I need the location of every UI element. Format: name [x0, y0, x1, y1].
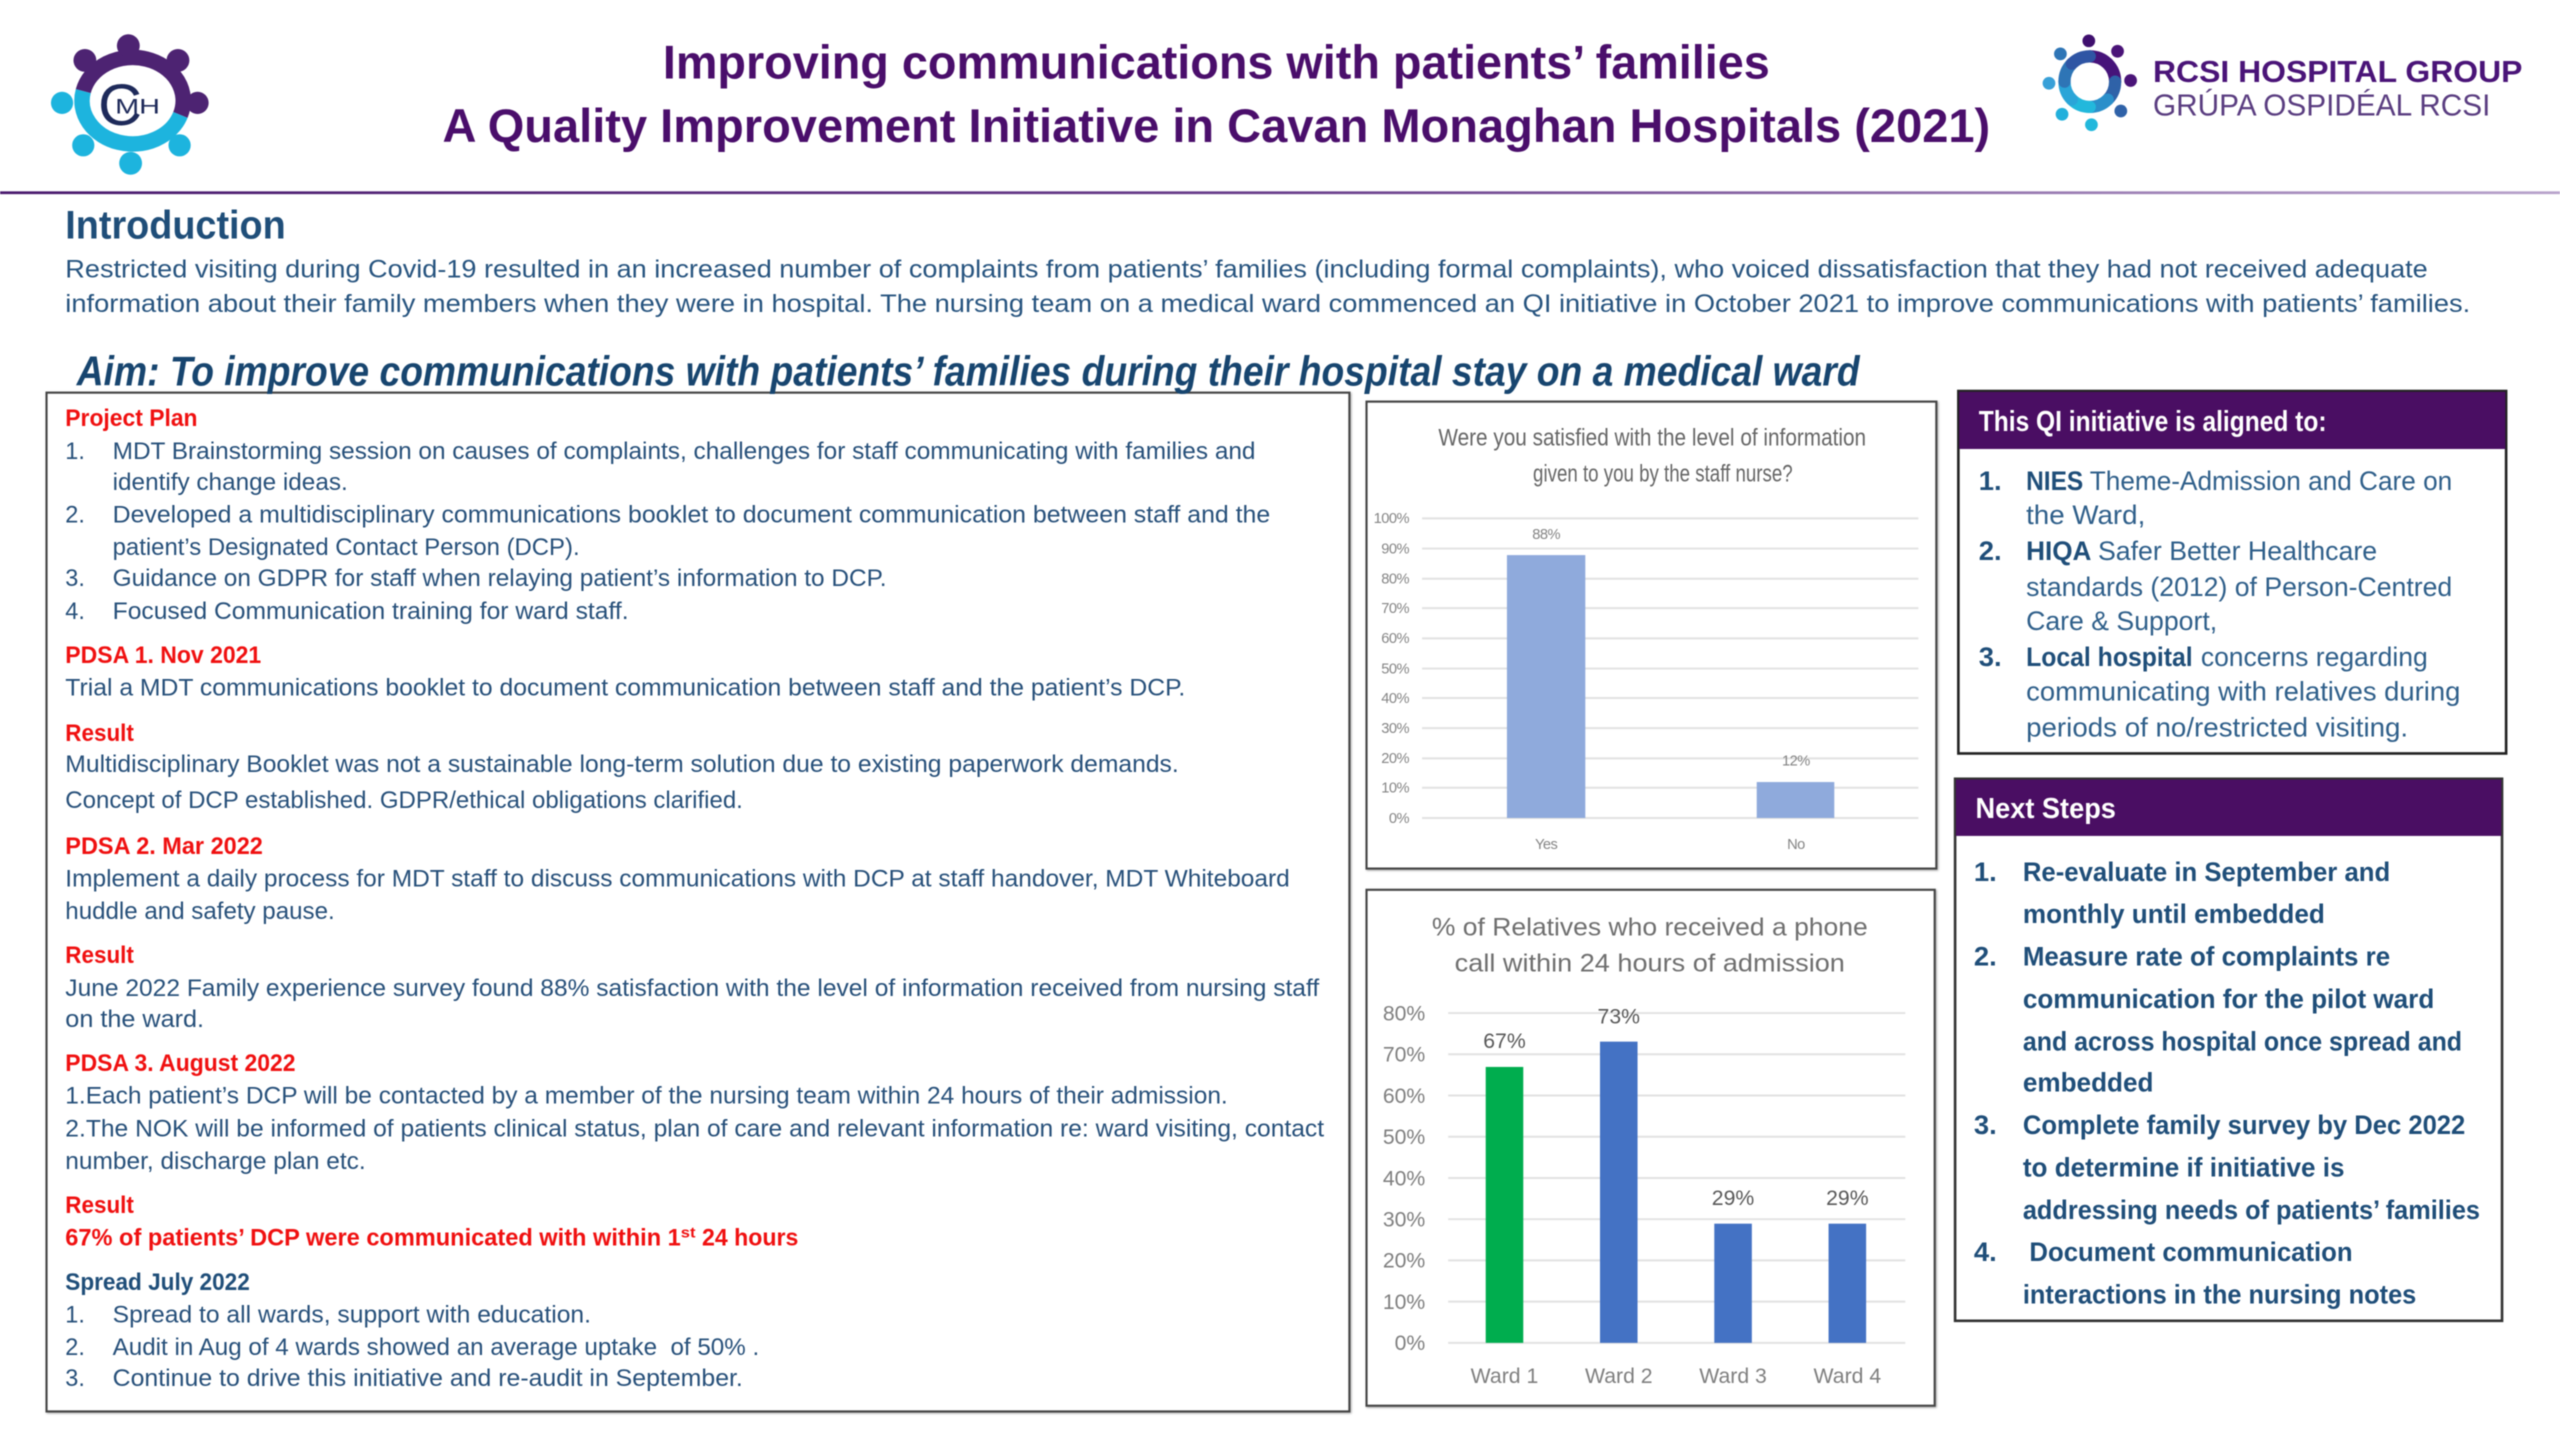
- chart: phone call within 24 hours: 0%: [1395, 1332, 1425, 1355]
- chart: phone call within 24 hours: 29%: [1712, 1187, 1754, 1210]
- chart: phone call within 24 hours: 40%: [1383, 1167, 1425, 1190]
- project plan: 3.: [65, 566, 85, 592]
- panel: next steps: 1.: [1974, 857, 1997, 887]
- panel: next steps: [1955, 779, 2502, 1321]
- panel: next steps: Measure rate of complaints re: [2023, 942, 2390, 972]
- panel: project plan and PDSA cycles: [47, 393, 1349, 1411]
- panel: QI initiative alignment: Safer Better Healthcare: [2098, 536, 2377, 566]
- introduction: Restricted visiting during Covid-19 resulted in an increased number of complaints from patients’ families (including formal complaints), who voiced dissatisfaction that they had not received adequate: [65, 256, 2428, 284]
- chart: phone call within 24 hours: 80%: [1383, 1002, 1425, 1025]
- chart: satisfaction with information: Were you satisfied with the level of information: [1438, 426, 1866, 452]
- logo: RCSI Hospital Group: RCSI HOSPITAL GROUP: [2153, 56, 2522, 89]
- chart: phone call within 24 hours: 20%: [1383, 1250, 1425, 1273]
- panel: next steps: addressing needs of patients’ families: [2023, 1195, 2480, 1225]
- chart: phone call within 24 hours: 60%: [1383, 1085, 1425, 1108]
- panel: QI initiative alignment: Care & Support,: [2026, 606, 2217, 636]
- panel: QI initiative alignment: 2.: [1979, 536, 2002, 566]
- panel: next steps: embedded: [2023, 1067, 2153, 1097]
- project plan: Developed a multidisciplinary communications booklet to document communication between staff and the: [113, 502, 1270, 528]
- spread: Audit in Aug of 4 wards showed an average uptake of 50% .: [113, 1335, 759, 1361]
- PDSA 3: 24 hours: [702, 1226, 798, 1252]
- logo: RCSI Hospital Group: GRÚPA OSPIDÉAL RCSI: [2153, 90, 2490, 123]
- logo: CMH: [51, 34, 209, 175]
- panel: next steps: monthly until embedded: [2023, 899, 2325, 929]
- title: A Quality Improvement Initiative in Cavan Monaghan Hospitals (2021): [442, 100, 1990, 153]
- spread: Spread July 2022: [65, 1270, 250, 1296]
- panel: next steps: to determine if initiative is: [2023, 1152, 2344, 1182]
- panel: next steps: Next Steps: [1976, 793, 2116, 825]
- panel: QI initiative alignment: periods of no/restricted visiting.: [2026, 712, 2408, 742]
- aim: Aim: To improve communications with patients’ families during their hospital stay on a medical ward: [76, 347, 1861, 394]
- chart: satisfaction with information: 70%: [1381, 601, 1409, 617]
- panel: QI initiative alignment: standards (2012) of Person-Centred: [2026, 572, 2452, 602]
- PDSA 1: [65, 643, 1185, 814]
- spread: Continue to drive this initiative and re-audit in September.: [113, 1366, 743, 1392]
- project plan: Focused Communication training for ward staff.: [113, 599, 629, 625]
- chart: satisfaction with information: 88%: [1532, 527, 1560, 543]
- panel: next steps: interactions in the nursing notes: [2023, 1280, 2416, 1310]
- logo: CMH: MH: [115, 95, 160, 118]
- chart: phone call within 24 hours: [1367, 890, 1935, 1406]
- introduction: information about their family members when they were in hospital. The nursing team on a medical ward commenced an QI initiative in October 2021 to improve communications with patients’ families.: [65, 290, 2470, 318]
- PDSA 3: number, discharge plan etc.: [65, 1149, 366, 1175]
- PDSA 3: st: [681, 1226, 696, 1242]
- introduction: [65, 203, 2470, 318]
- PDSA 3: 67% of patients’ DCP were communicated with within 1: [65, 1226, 681, 1252]
- chart: satisfaction with information: 40%: [1381, 691, 1409, 707]
- chart: phone call within 24 hours: 50%: [1383, 1126, 1425, 1149]
- panel: QI initiative alignment: Local hospital: [2026, 642, 2193, 672]
- PDSA 3: 2.The NOK will be informed of patients clinical status, plan of care and relevant information re: ward visiting, contact: [65, 1116, 1325, 1142]
- title: Improving communications with patients’ families: [663, 36, 1770, 89]
- chart: satisfaction with information: No: [1787, 837, 1805, 853]
- project plan: Project Plan: [65, 406, 198, 432]
- logo: RCSI Hospital Group: [2043, 34, 2522, 131]
- logo: CMH: C: [98, 73, 142, 138]
- chart: satisfaction with information: 90%: [1381, 541, 1409, 557]
- PDSA 2: Implement a daily process for MDT staff to discuss communications with DCP at staff handover, MDT Whiteboard: [65, 867, 1290, 893]
- chart: satisfaction with information: [1367, 402, 1936, 869]
- spread: 3.: [65, 1366, 85, 1392]
- project plan: [65, 406, 1270, 625]
- panel: QI initiative alignment: 1.: [1979, 466, 2002, 496]
- chart: satisfaction with information: 60%: [1381, 631, 1409, 647]
- panel: QI initiative alignment: NIES: [2026, 466, 2083, 496]
- panel: QI initiative alignment: the Ward,: [2026, 500, 2145, 530]
- project plan: identify change ideas.: [113, 470, 348, 496]
- panel: QI initiative alignment: Theme-Admission and Care on: [2090, 466, 2452, 496]
- introduction: Introduction: [65, 203, 286, 247]
- PDSA 2: Result: [65, 943, 134, 969]
- panel: QI initiative alignment: concerns regarding: [2201, 642, 2428, 672]
- project plan: 2.: [65, 502, 85, 528]
- chart: phone call within 24 hours: 67%: [1483, 1030, 1526, 1053]
- chart: phone call within 24 hours: Ward 4: [1814, 1365, 1881, 1388]
- PDSA 2: on the ward.: [65, 1007, 204, 1033]
- project plan: Guidance on GDPR for staff when relaying patient’s information to DCP.: [113, 566, 887, 592]
- chart: phone call within 24 hours: 10%: [1383, 1291, 1425, 1314]
- panel: QI initiative alignment: This QI initiative is aligned to:: [1979, 406, 2327, 438]
- PDSA 3: PDSA 3. August 2022: [65, 1051, 296, 1077]
- chart: satisfaction with information: 20%: [1381, 751, 1409, 767]
- title: [442, 36, 1990, 153]
- spread: [65, 1270, 759, 1392]
- PDSA 2: PDSA 2. Mar 2022: [65, 834, 263, 860]
- panel: QI initiative alignment: communicating with relatives during: [2026, 676, 2460, 706]
- PDSA 2: June 2022 Family experience survey found 88% satisfaction with the level of information received from nursing staff: [65, 976, 1320, 1002]
- PDSA 3: 1.Each patient’s DCP will be contacted by a member of the nursing team within 24 hours of their admission.: [65, 1084, 1228, 1110]
- chart: phone call within 24 hours: Ward 1: [1471, 1365, 1538, 1388]
- chart: phone call within 24 hours: 29%: [1826, 1187, 1869, 1210]
- chart: phone call within 24 hours: Ward 3: [1699, 1365, 1767, 1388]
- chart: phone call within 24 hours: 73%: [1598, 1006, 1640, 1029]
- chart: satisfaction with information: 30%: [1381, 721, 1409, 737]
- chart: phone call within 24 hours: call within 24 hours of admission: [1455, 949, 1845, 977]
- panel: next steps: communication for the pilot ward: [2023, 984, 2434, 1014]
- panel: next steps: Complete family survey by Dec 2022: [2023, 1110, 2465, 1140]
- project plan: MDT Brainstorming session on causes of complaints, challenges for staff communicating with families and: [113, 439, 1256, 465]
- panel: next steps: 4.: [1974, 1237, 1997, 1267]
- panel: next steps: Re-evaluate in September and: [2023, 857, 2390, 887]
- PDSA 1: Concept of DCP established. GDPR/ethical obligations clarified.: [65, 788, 743, 814]
- PDSA 3: Result: [65, 1193, 134, 1219]
- chart: satisfaction with information: given to you by the staff nurse?: [1533, 462, 1793, 488]
- PDSA 3: [65, 1051, 1325, 1252]
- chart: phone call within 24 hours: Ward 2: [1585, 1365, 1653, 1388]
- project plan: patient’s Designated Contact Person (DCP).: [113, 535, 580, 561]
- panel: QI initiative alignment: [1958, 391, 2506, 753]
- spread: 1.: [65, 1302, 85, 1328]
- PDSA 1: PDSA 1. Nov 2021: [65, 643, 261, 669]
- panel: next steps: 2.: [1974, 942, 1997, 972]
- PDSA 2: huddle and safety pause.: [65, 899, 335, 925]
- spread: Spread to all wards, support with education.: [113, 1302, 591, 1328]
- PDSA 1: Trial a MDT communications booklet to document communication between staff and the patient’s DCP.: [65, 676, 1185, 702]
- panel: QI initiative alignment: 3.: [1979, 642, 2002, 672]
- panel: next steps: 3.: [1974, 1110, 1997, 1140]
- spread: 2.: [65, 1335, 85, 1361]
- chart: phone call within 24 hours: 70%: [1383, 1044, 1425, 1067]
- chart: satisfaction with information: 12%: [1782, 754, 1810, 770]
- chart: satisfaction with information: 100%: [1374, 511, 1409, 527]
- chart: satisfaction with information: 80%: [1381, 572, 1409, 588]
- PDSA 2: [65, 834, 1320, 1033]
- project plan: 4.: [65, 599, 85, 625]
- chart: satisfaction with information: 0%: [1389, 811, 1409, 827]
- chart: satisfaction with information: Yes: [1535, 837, 1557, 853]
- chart: phone call within 24 hours: % of Relatives who received a phone: [1432, 914, 1868, 942]
- panel: next steps: Document communication: [2029, 1237, 2353, 1267]
- chart: satisfaction with information: 50%: [1381, 661, 1409, 677]
- chart: phone call within 24 hours: 30%: [1383, 1209, 1425, 1232]
- panel: next steps: and across hospital once spread and: [2023, 1027, 2462, 1057]
- chart: satisfaction with information: 10%: [1381, 781, 1409, 797]
- PDSA 1: Multidisciplinary Booklet was not a sustainable long-term solution due to existing paperwork demands.: [65, 752, 1179, 778]
- panel: QI initiative alignment: HIQA: [2026, 536, 2091, 566]
- PDSA 1: Result: [65, 721, 134, 747]
- project plan: 1.: [65, 439, 85, 465]
